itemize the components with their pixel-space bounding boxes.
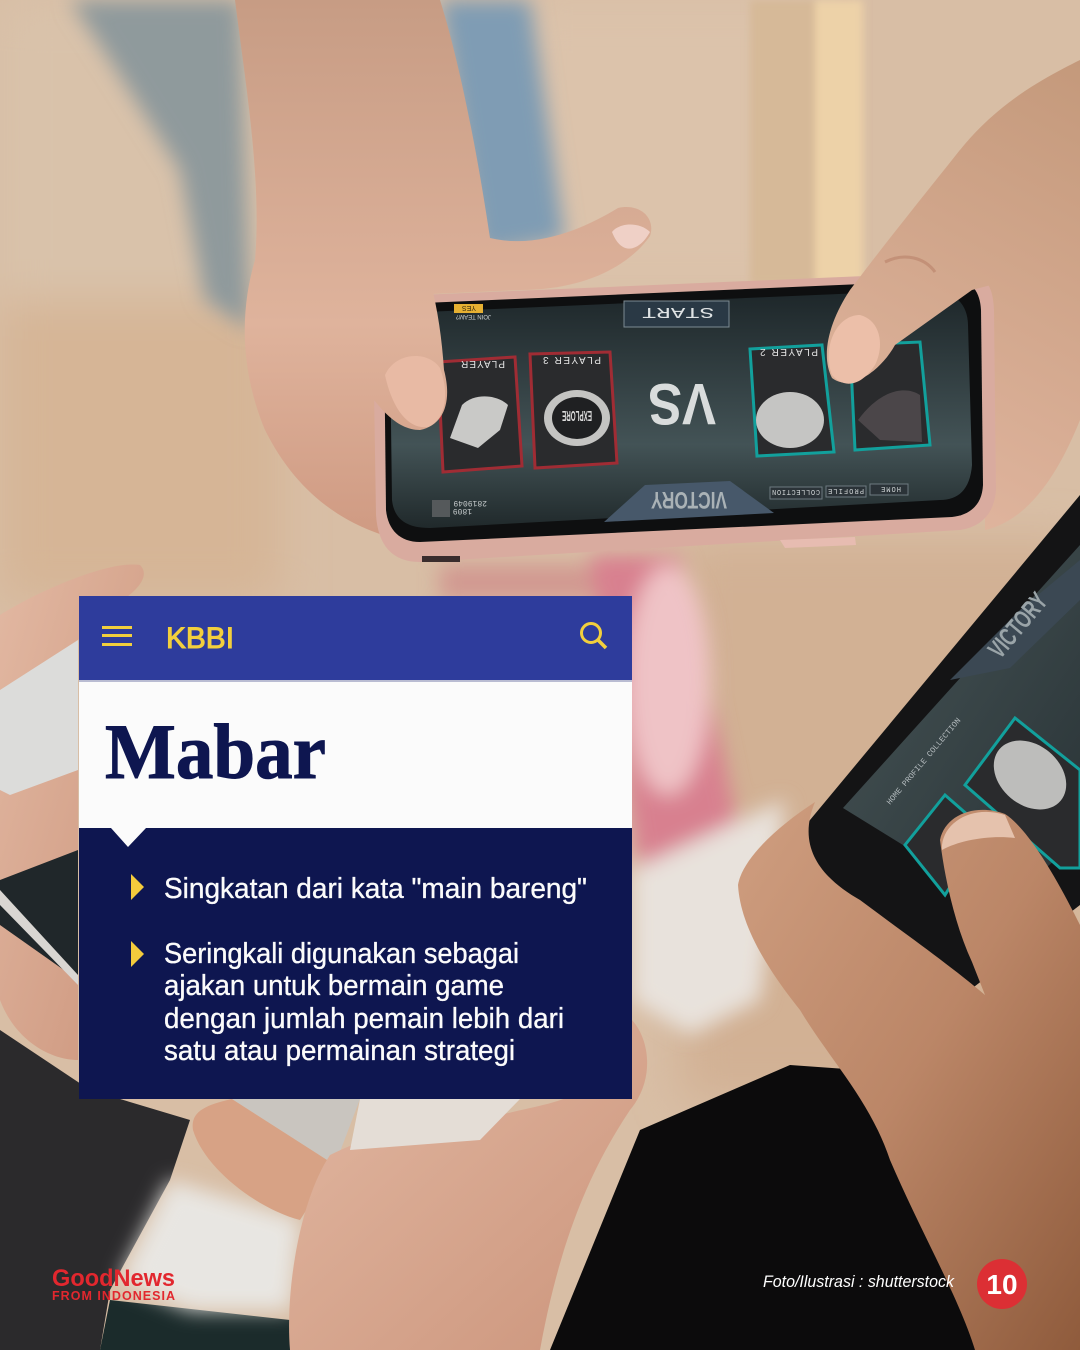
game cards: teal team: PLAYER 2 bbox=[760, 346, 818, 357]
panel: KBBI dictionary card bbox=[79, 596, 632, 1099]
player stats: 2819049 bbox=[453, 498, 487, 507]
game tab: victory rotated bbox=[950, 560, 1080, 680]
bullet two: Seringkali digunakan sebagai bbox=[164, 938, 519, 970]
game nav buttons bbox=[770, 484, 908, 499]
jeans of player at top bbox=[70, 0, 565, 330]
hand: lower right player bbox=[738, 802, 1080, 1350]
header label: KBBI bbox=[166, 622, 234, 655]
game nav buttons: COLLECTION bbox=[772, 487, 820, 495]
game tab: victory: VICTORY bbox=[651, 486, 727, 513]
definition panel bbox=[79, 828, 632, 1099]
card header bar bbox=[79, 596, 632, 680]
sneakers in the centre bbox=[440, 555, 785, 1035]
bullet two: satu atau permainan strategi bbox=[164, 1035, 515, 1067]
versus label: VS bbox=[648, 371, 716, 436]
game cards: teal team bbox=[750, 342, 930, 456]
phone: top, rose gold landscape bbox=[373, 272, 996, 562]
title: Mabar: Mabar bbox=[105, 708, 326, 795]
game nav buttons: HOME bbox=[881, 484, 901, 492]
game cards: teal, rotated bbox=[905, 718, 1080, 895]
game badge: yes bbox=[454, 304, 491, 319]
game cards: red team: PLAYER 3 bbox=[543, 354, 601, 365]
page number badge: 10 bbox=[986, 1269, 1018, 1300]
wood plank highlight bbox=[750, 0, 863, 285]
logo: GoodNews from Indonesia: GoodNews bbox=[52, 1265, 175, 1292]
dark clothing at bottom bbox=[0, 1030, 980, 1350]
game button: start: START bbox=[642, 303, 714, 320]
title panel bbox=[79, 680, 632, 828]
hand: top centre player index finger bbox=[300, 240, 447, 430]
hand: top centre player palm and thumb bbox=[235, 0, 651, 540]
page number badge bbox=[977, 1259, 1027, 1309]
phone: lower right black bbox=[796, 495, 1080, 990]
bullet one: Singkatan dari kata "main bareng" bbox=[164, 873, 587, 905]
icon: search bbox=[582, 624, 606, 648]
logo: GoodNews from Indonesia: FROM INDONESIA bbox=[52, 1289, 175, 1303]
hand: upper right player thumb bbox=[827, 150, 1040, 384]
bullet two: ajakan untuk bermain game bbox=[164, 970, 504, 1002]
game button: start bbox=[624, 301, 729, 327]
game cards: red team bbox=[438, 352, 617, 472]
player stats: 1809 bbox=[453, 506, 472, 515]
game cards: red team: PLAYER bbox=[461, 358, 505, 369]
hand: upper right player palm bbox=[880, 60, 1080, 530]
game cards: red team: EXPLORE bbox=[562, 407, 592, 424]
game badge: yes: YES bbox=[462, 304, 476, 311]
bullet two bbox=[131, 938, 564, 1067]
game tab: victory bbox=[604, 481, 774, 522]
player stats bbox=[432, 498, 487, 517]
game badge: yes: JOIN TEAM? bbox=[455, 313, 491, 319]
photo credit: Foto/Ilustrasi : shutterstock bbox=[763, 1272, 955, 1291]
pointer notch bbox=[111, 828, 146, 847]
hand: upper left player with phone bbox=[0, 564, 144, 1060]
bullet two: dengan jumlah pemain lebih dari bbox=[164, 1003, 564, 1035]
game nav rotated: HOME PROFILE COLLECTION bbox=[885, 716, 963, 807]
game tab: victory rotated: VICTORY bbox=[982, 586, 1053, 664]
hand: bottom centre player bbox=[193, 1020, 647, 1350]
game nav buttons: PROFILE bbox=[828, 486, 864, 494]
icon: menu bbox=[102, 626, 132, 646]
